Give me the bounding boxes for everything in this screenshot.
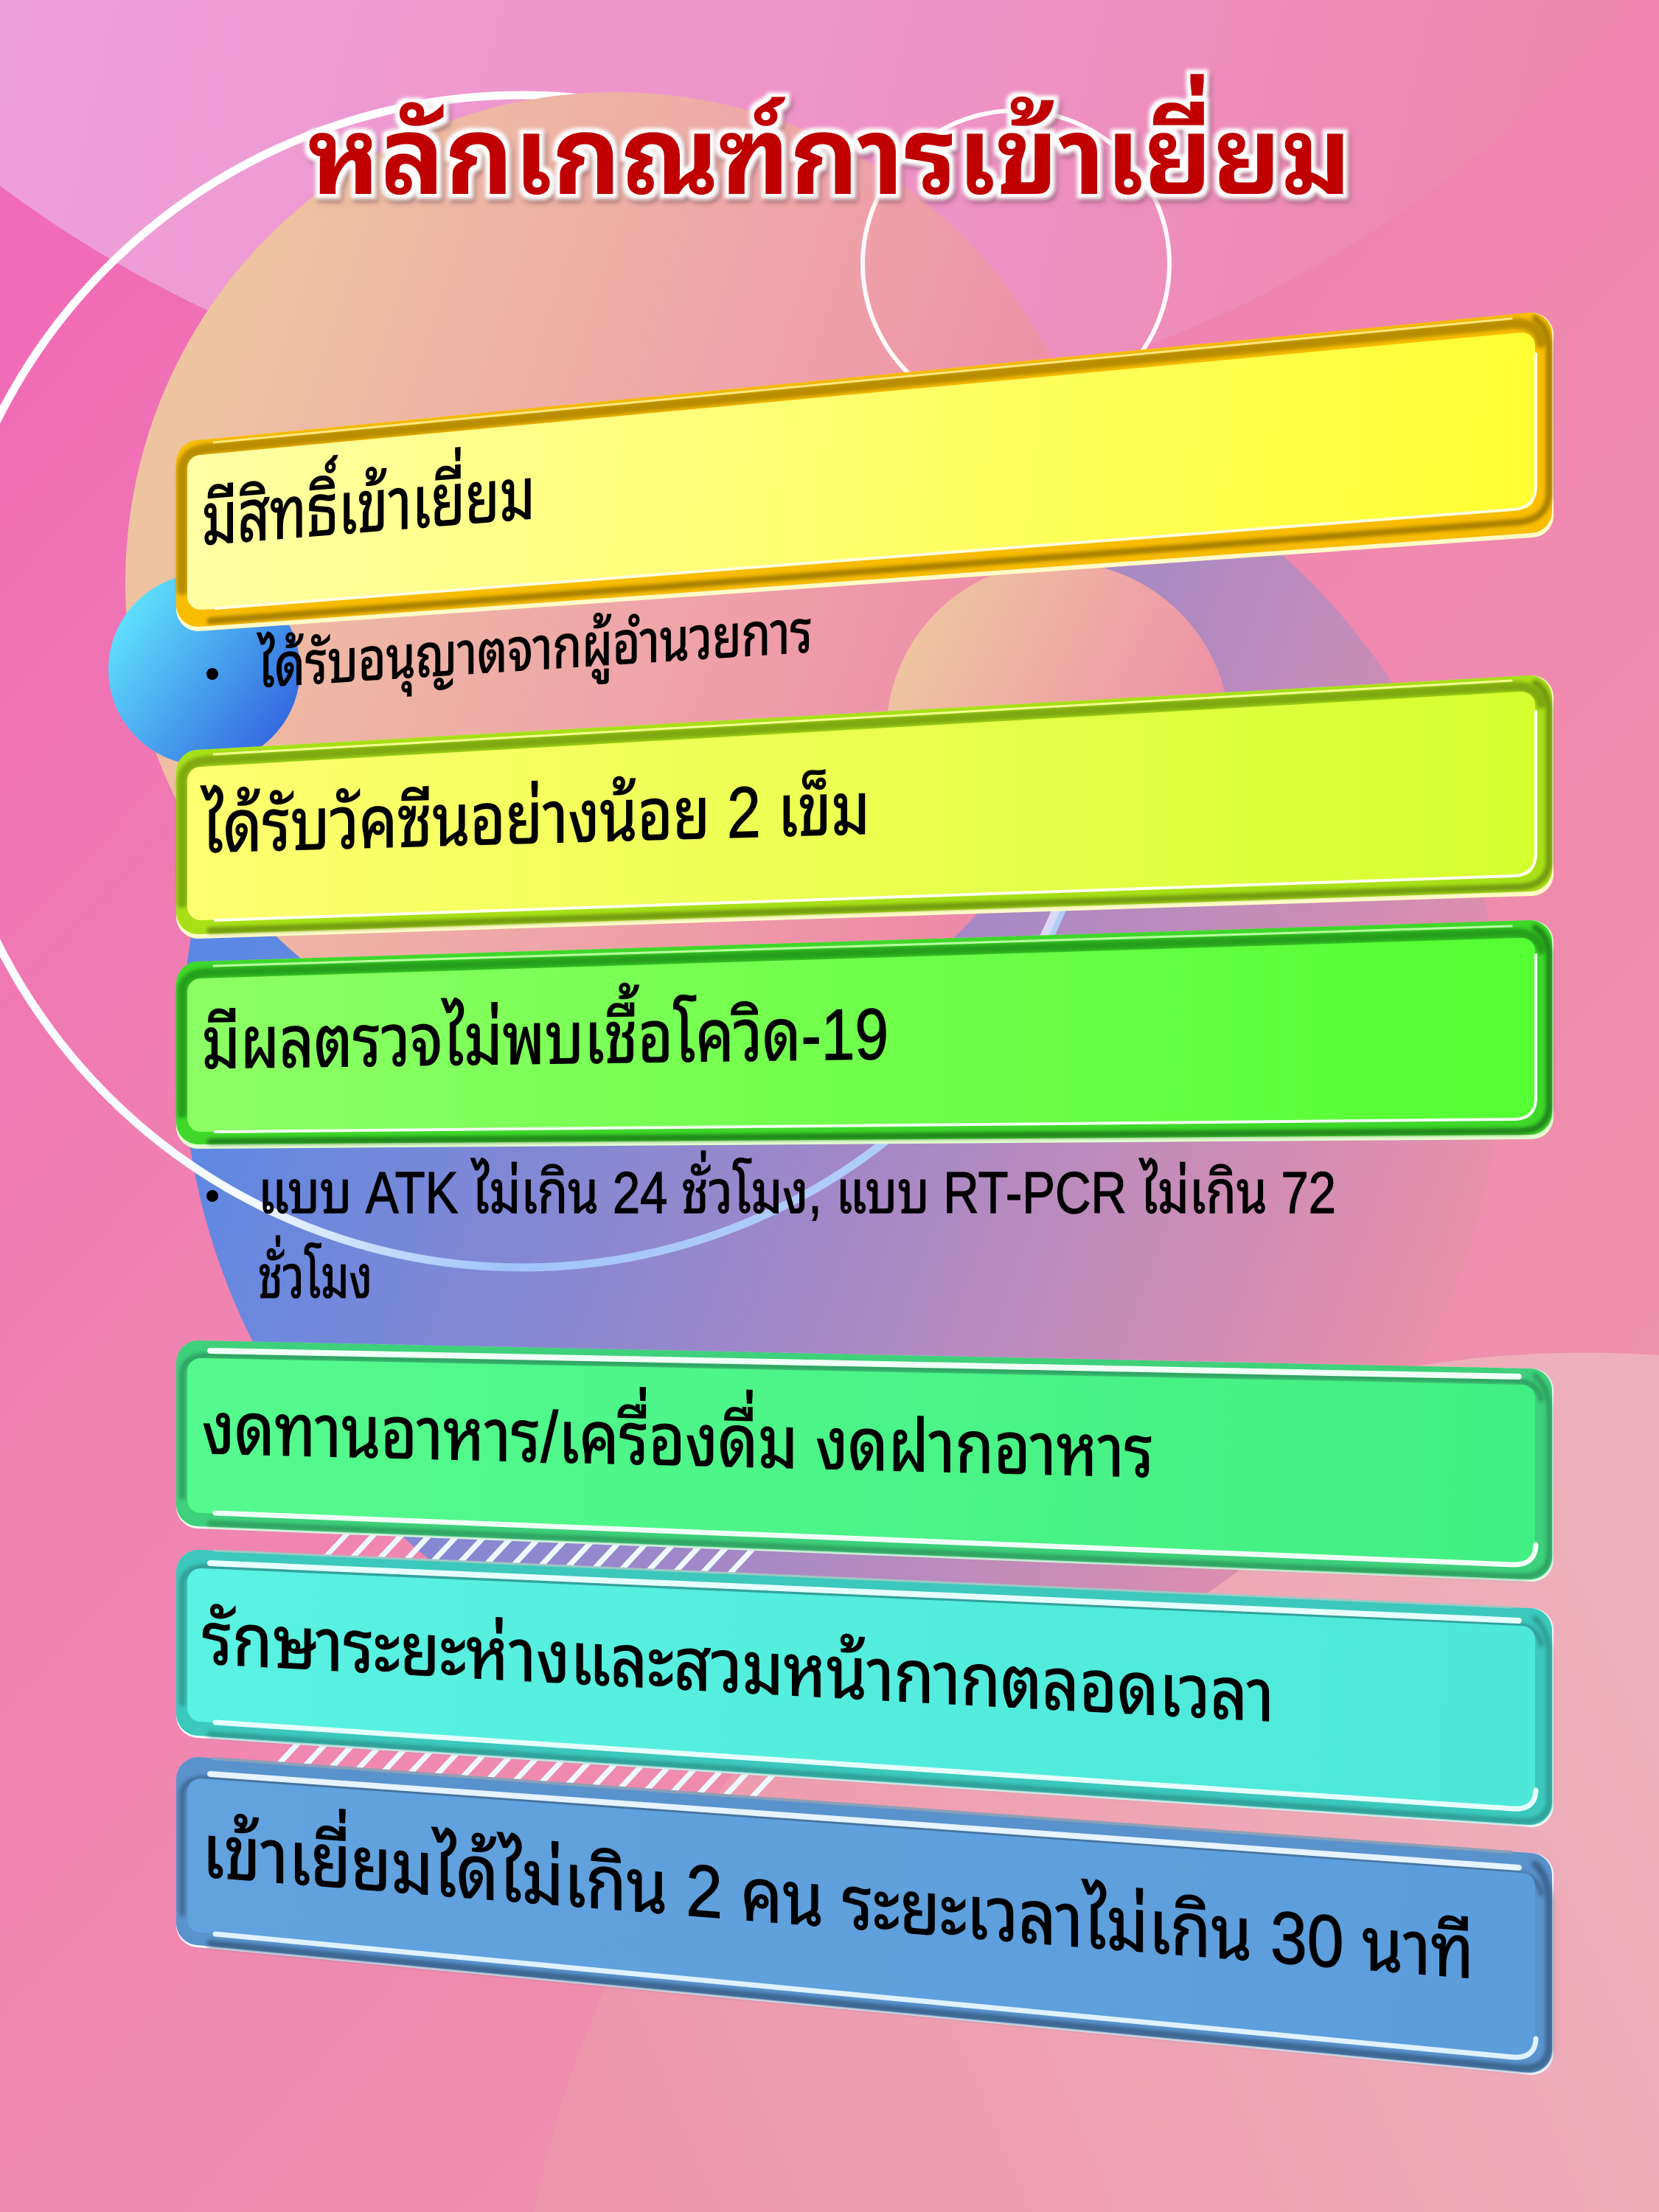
bullet: test detail: ชั่วโมง	[258, 1235, 372, 1310]
heading: box 2: ได้รับวัคซีนอย่างน้อย 2 เข็ม	[200, 767, 870, 868]
heading: box 5: รักษาระยะห่างและสวมหน้ากากตลอดเวลา	[202, 1598, 1274, 1737]
panel: box 6 visitor limits	[182, 1759, 1549, 2068]
heading: box 3: มีผลตรวจไม่พบเชื้อโควิด-19	[202, 979, 888, 1084]
panel: box 1 permission to visit	[182, 319, 1549, 621]
bullet: permission detail	[206, 597, 813, 706]
panel: box 5 distance and mask	[182, 1551, 1549, 1821]
heading: box 1: มีสิทธิ์เข้าเยี่ยม	[202, 439, 535, 560]
title: หลักเกณฑ์การเข้าเยี่ยม	[307, 74, 1352, 217]
bullet: test detail	[206, 1150, 1336, 1310]
bullet: test detail: แบบ ATK ไม่เกิน 24 ชั่วโมง, แบบ RT-PCR ไม่เกิน 72	[258, 1150, 1336, 1225]
panel: box 3 covid test	[182, 926, 1549, 1141]
panel: box 2 vaccine	[182, 681, 1549, 931]
heading: box 6: เข้าเยี่ยมได้ไม่เกิน 2 คน ระยะเวลาไม่เกิน 30 นาที	[202, 1798, 1474, 1994]
panel: box 4 no food	[182, 1351, 1549, 1576]
heading: box 4: งดทานอาหาร/เครื่องดื่ม งดฝากอาหาร	[202, 1376, 1154, 1492]
bullet: permission detail: ได้รับอนุญาตจากผู้อำนวยการ	[257, 597, 813, 706]
